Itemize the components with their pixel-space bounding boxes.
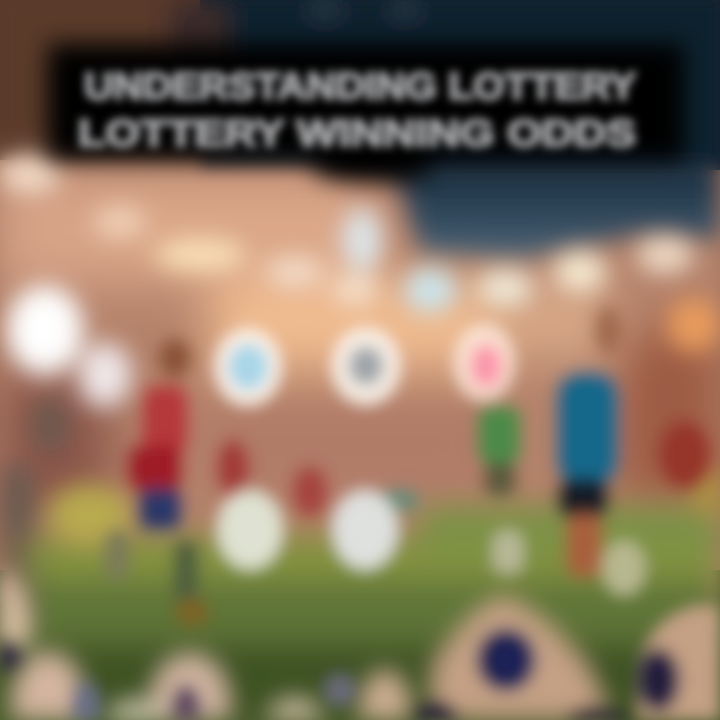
icon circles xyxy=(215,324,514,570)
grass field xyxy=(0,505,720,720)
player: blue shirt xyxy=(556,306,646,596)
stadium lights and crowd highlights xyxy=(0,157,720,545)
player: green shirt xyxy=(477,405,524,574)
icon: white circle left xyxy=(217,490,283,570)
background players xyxy=(217,421,711,518)
title text: UNDERSTANDING LOTTERY xyxy=(84,66,636,108)
icon: white circle right xyxy=(332,490,398,570)
title panel xyxy=(48,44,684,182)
title text xyxy=(78,66,636,155)
icon: blue circle xyxy=(215,329,281,405)
foreground crowd xyxy=(0,570,720,720)
icon: grey circle xyxy=(332,328,400,404)
title text: LOTTERY WINNING ODDS xyxy=(78,113,636,155)
icon: pink circle xyxy=(454,324,514,400)
player: red shirt xyxy=(105,338,210,626)
